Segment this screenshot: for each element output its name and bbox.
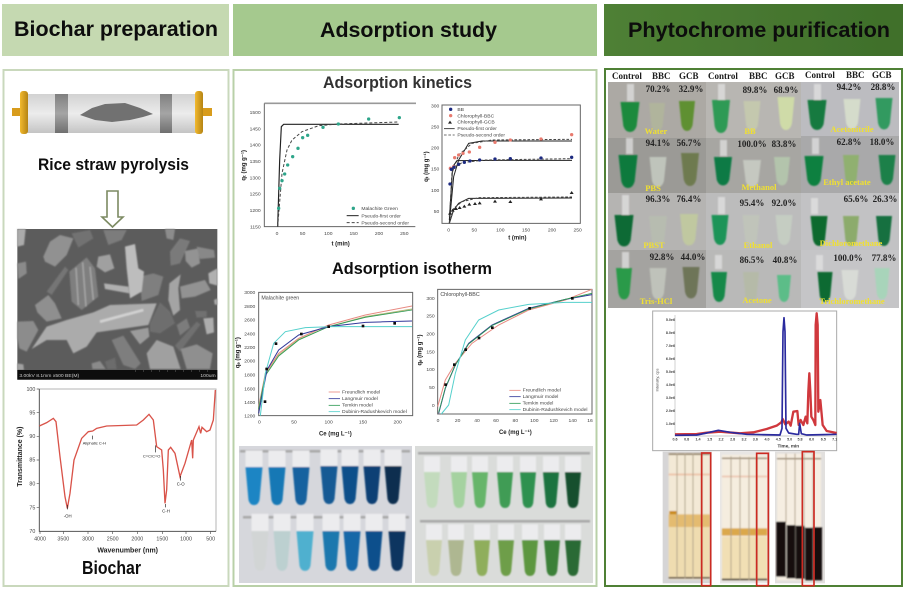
chart: LC-MS chromatogram: 0.6 [672, 437, 678, 441]
chart: FTIR spectrum: 100 [26, 387, 35, 393]
chart: malachite green isotherm: 0 [258, 419, 261, 425]
chart: chlorophyll-BBC isotherm: 16 [587, 418, 593, 424]
chart: malachite green kinetics [240, 103, 416, 248]
chart: chlorophyll kinetics: 250 [431, 125, 440, 131]
chart: LC-MS chromatogram: 6.0 [809, 437, 814, 441]
chart: malachite green isotherm: 2400 [244, 331, 256, 337]
chart: chlorophyll kinetics: Chlorophyll-BBC [457, 113, 495, 119]
header: phytochrome purification [604, 4, 903, 56]
photo grid: solvent extraction tubes: Tris-HCl [640, 296, 673, 306]
chart: malachite green kinetics: 0 [276, 231, 279, 237]
chart: FTIR spectrum: 3000 [82, 536, 94, 542]
solvent tube grid header: BBC [652, 71, 671, 81]
photo grid: solvent extraction tubes: 68.9% [774, 85, 798, 95]
heading: adsorption kinetics: Adsorption kinetics [323, 73, 472, 92]
photo grid: solvent extraction tubes: Water [645, 126, 668, 136]
solvent tube grid header: Control [708, 71, 738, 81]
photo grid: solvent extraction tubes: Ethanol [744, 240, 773, 250]
chart: malachite green kinetics: Pseudo-first order [361, 213, 401, 219]
photo grid: solvent extraction tubes: 89.8% [743, 85, 767, 95]
chart: LC-MS chromatogram [653, 311, 837, 451]
chart: malachite green kinetics: 1250 [250, 192, 261, 198]
chart: malachite green isotherm: 2800 [244, 304, 256, 310]
photo grid: solvent extraction tubes: PBST [643, 240, 665, 250]
photos: gel strips [663, 452, 825, 586]
chart: chlorophyll-BBC isotherm: Ce (mg L⁻¹) [499, 429, 532, 436]
chart: chlorophyll kinetics [423, 103, 582, 241]
header: adsorption study: Adsorption study [320, 19, 497, 42]
chart: malachite green kinetics: 200 [375, 231, 383, 237]
photo grid: solvent extraction tubes: 65.6% [844, 194, 868, 204]
chart: FTIR spectrum: Aliphatic C-H [83, 441, 106, 446]
chart: malachite green isotherm: 1400 [244, 400, 256, 406]
chart: malachite green isotherm: 2600 [244, 318, 256, 324]
chart: chlorophyll kinetics: 0 [447, 228, 450, 234]
chart: LC-MS chromatogram: 8.0e6 [666, 331, 675, 335]
chart: chlorophyll-BBC isotherm: 0 [432, 403, 435, 409]
label: rice straw pyrolysis: Rice straw pyrolysis [38, 155, 189, 174]
chart: malachite green isotherm: 150 [359, 419, 367, 425]
chart: LC-MS chromatogram: 5.0e6 [666, 318, 675, 322]
chart: FTIR spectrum: 70 [29, 529, 35, 535]
chart: FTIR spectrum: -OH [64, 514, 72, 519]
chart: chlorophyll kinetics: 50 [472, 228, 477, 234]
arrow: pyrolysis to biochar [102, 191, 123, 227]
chart: chlorophyll-BBC isotherm: 0 [437, 418, 440, 424]
chart: FTIR spectrum: C=C/C=O [143, 454, 160, 459]
chart: LC-MS chromatogram: 1.0e6 [666, 422, 675, 426]
chart: chlorophyll-BBC isotherm: 150 [426, 349, 435, 355]
chart: malachite green isotherm: Freundlich model [342, 389, 380, 395]
photo grid: solvent extraction tubes: Trichloromethane [819, 296, 885, 306]
chart: LC-MS chromatogram: 3.6 [753, 437, 758, 441]
solvent tube grid header [612, 70, 892, 81]
chart: malachite green kinetics: 50 [300, 231, 306, 237]
chart: chlorophyll-BBC isotherm: qₑ (mg g⁻¹) [416, 334, 423, 366]
chart: malachite green isotherm: 200 [394, 419, 402, 425]
photo grid: solvent extraction tubes: 92.0% [772, 198, 796, 208]
chart: LC-MS chromatogram: 4.0 [764, 437, 770, 441]
chart: malachite green isotherm [234, 290, 413, 437]
photo grid: solvent extraction tubes: 94.2% [837, 82, 861, 92]
chart: chlorophyll kinetics: Pseudo-second order [457, 132, 505, 138]
chart: chlorophyll-BBC isotherm: Temkin model [523, 401, 553, 407]
photo: malachite green tubes [239, 446, 412, 583]
chart: malachite green isotherm: Ce (mg L⁻¹) [319, 430, 352, 437]
chart: malachite green isotherm: Malachite green [261, 295, 299, 301]
chart: malachite green kinetics: Malachite Green [361, 206, 398, 212]
chart: chlorophyll-BBC isotherm: Chlorophyll-BBC [440, 292, 480, 298]
chart: chlorophyll-BBC isotherm: 60 [493, 418, 499, 424]
chart: FTIR spectrum: Transmittance (%) [17, 427, 24, 487]
chart: chlorophyll-BBC isotherm: 20 [455, 418, 461, 424]
photo grid: solvent extraction tubes: 56.7% [677, 138, 701, 148]
chart: LC-MS chromatogram: 6.0e6 [666, 357, 675, 361]
chart: FTIR spectrum: 75 [29, 505, 35, 511]
chart: chlorophyll-BBC isotherm: 140 [568, 418, 577, 424]
icon: pyrolysis tube furnace [12, 91, 212, 134]
chart: LC-MS chromatogram: 2.0e6 [666, 409, 675, 413]
chart: FTIR spectrum: Wavenumber (nm) [97, 548, 158, 555]
chart: LC-MS chromatogram: Intensity, cps [654, 369, 659, 391]
chart: chlorophyll-BBC isotherm: 100 [530, 418, 539, 424]
panel: adsorption study [234, 70, 596, 586]
chart: chlorophyll kinetics: 200 [548, 228, 556, 234]
chart: LC-MS chromatogram: 2.8 [730, 437, 735, 441]
chart: LC-MS chromatogram: 7.1 [832, 437, 837, 441]
chart: chlorophyll kinetics: qₜ (mg g⁻¹) [423, 151, 430, 182]
chart: FTIR spectrum: 1500 [156, 536, 168, 542]
chart: chlorophyll-BBC isotherm: 40 [474, 418, 480, 424]
chart: chlorophyll kinetics: 300 [431, 103, 440, 109]
image: SEM micrograph: 100um [200, 373, 216, 379]
photo grid: solvent extraction tubes: 96.3% [646, 194, 670, 204]
chart: chlorophyll-BBC isotherm [416, 289, 593, 436]
chart: chlorophyll kinetics: 200 [431, 146, 440, 152]
image: SEM micrograph: 3.00kV 8.1mm x500 BE(M) [19, 373, 80, 379]
photo grid: solvent extraction tubes: Ethyl acetate [823, 177, 871, 187]
chart: LC-MS chromatogram: 1.5 [707, 437, 712, 441]
chart: chlorophyll-BBC isotherm: 120 [549, 418, 558, 424]
solvent tube grid header: Control [805, 70, 835, 80]
chart: LC-MS chromatogram: 1.4 [695, 437, 702, 441]
photo grid: solvent extraction tubes: PBS [645, 183, 661, 193]
header: phytochrome purification: Phytochrome purification [628, 19, 890, 42]
photo grid: solvent extraction tubes: 100.0% [737, 139, 767, 149]
chart: LC-MS chromatogram: 3.0e6 [666, 396, 675, 400]
chart: malachite green kinetics: 1200 [250, 208, 261, 214]
photo grid: solvent extraction tubes: 94.1% [646, 138, 670, 148]
chart: FTIR spectrum: C-O [177, 482, 185, 487]
chart: chlorophyll kinetics: 50 [434, 209, 440, 215]
photo grid: solvent extraction tubes: 18.0% [870, 137, 894, 147]
label: biochar: Biochar [82, 558, 141, 578]
chart: malachite green isotherm: 3000 [244, 290, 256, 296]
chart: malachite green isotherm: 2000 [244, 359, 256, 365]
chart: chlorophyll-BBC isotherm: 300 [426, 296, 435, 302]
photo grid: solvent extraction tubes: 32.9% [679, 84, 703, 94]
chart: malachite green kinetics: Pseudo-second order [361, 220, 409, 226]
solvent tube grid header: GCB [679, 71, 699, 81]
chart: FTIR spectrum [17, 387, 216, 555]
chart: chlorophyll kinetics: t (min) [508, 235, 526, 241]
chart: FTIR spectrum: 4000 [34, 536, 46, 542]
chart: malachite green isotherm: 1800 [244, 372, 256, 378]
chart: FTIR spectrum: 2000 [131, 536, 143, 542]
panel: biochar preparation [4, 70, 228, 586]
chart: malachite green kinetics: 1500 [250, 110, 261, 116]
chart: chlorophyll-BBC isotherm: 100 [426, 367, 435, 373]
chart: LC-MS chromatogram: 3.2 [741, 437, 747, 441]
photo grid: solvent extraction tubes: 28.8% [871, 82, 895, 92]
photo grid: solvent extraction tubes [608, 82, 899, 308]
photo grid: solvent extraction tubes: Acetonitrile [831, 124, 874, 134]
chart: FTIR spectrum: 1000 [180, 536, 192, 542]
chart: malachite green isotherm: 2200 [244, 345, 256, 351]
chart: FTIR spectrum: 3500 [57, 536, 69, 542]
photo grid: solvent extraction tubes: 95.4% [740, 198, 764, 208]
chart: malachite green isotherm: 50 [291, 419, 297, 425]
photo grid: solvent extraction tubes: 83.8% [772, 139, 796, 149]
header: adsorption study [233, 4, 597, 56]
photo grid: solvent extraction tubes: Methanol [742, 182, 777, 192]
chart: malachite green kinetics: 150 [350, 231, 358, 237]
chart: LC-MS chromatogram: Time, min [778, 444, 799, 449]
chart: LC-MS chromatogram: 7.0e6 [666, 344, 675, 348]
photo grid: solvent extraction tubes: 76.4% [677, 194, 701, 204]
chart: FTIR spectrum: C-H [162, 509, 170, 514]
chart: FTIR spectrum: 90 [29, 434, 35, 440]
chart: chlorophyll kinetics: 150 [522, 228, 530, 234]
photo grid: solvent extraction tubes: BB [744, 126, 756, 136]
photo grid: solvent extraction tubes: 70.2% [646, 84, 670, 94]
chart: chlorophyll-BBC isotherm: Langmuir model [523, 394, 558, 400]
image: SEM micrograph [17, 229, 217, 380]
chart: chlorophyll-BBC isotherm: Dubinin-Radushkevich model [523, 407, 588, 413]
chart: chlorophyll kinetics: 100 [496, 228, 505, 234]
photo grid: solvent extraction tubes: Acetone [742, 295, 772, 305]
chart: LC-MS chromatogram: 5.0 [787, 437, 792, 441]
chart: malachite green isotherm: 1200 [244, 414, 256, 420]
heading: adsorption isotherm: Adsorption isotherm [332, 259, 492, 278]
chart: malachite green kinetics: 1150 [250, 224, 261, 230]
photo grid: solvent extraction tubes: 62.8% [837, 137, 861, 147]
chart: malachite green isotherm: Langmuir model [342, 396, 378, 402]
chart: chlorophyll kinetics: Pseudo-first order [457, 126, 497, 132]
header: biochar preparation: Biochar preparation [14, 18, 218, 41]
chart: LC-MS chromatogram: 2.2 [718, 437, 724, 441]
solvent tube grid header: BBC [749, 71, 768, 81]
solvent tube grid header: GCB [872, 70, 892, 80]
chart: malachite green isotherm: 100 [325, 419, 333, 425]
chart: chlorophyll-BBC isotherm: Freundlich model [523, 388, 561, 394]
panel: phytochrome purification [605, 69, 902, 586]
photo grid: solvent extraction tubes: 86.5% [740, 255, 764, 265]
photo grid: solvent extraction tubes: Dichloromethane [820, 238, 883, 248]
header: biochar preparation [2, 4, 229, 56]
photo grid: solvent extraction tubes: 77.8% [872, 253, 896, 263]
chart: FTIR spectrum: 80 [29, 481, 35, 487]
chart: chlorophyll kinetics: Chlorophyll-GCB [457, 120, 495, 126]
chart: FTIR spectrum: 95 [29, 410, 35, 416]
solvent tube grid header: GCB [775, 71, 795, 81]
chart: malachite green isotherm: Temkin model [342, 403, 373, 409]
photo: chlorophyll tubes [415, 446, 593, 583]
chart: LC-MS chromatogram: 5.0e6 [666, 370, 675, 374]
chart: chlorophyll kinetics: 250 [573, 228, 582, 234]
chart: malachite green isotherm: qₑ (mg g⁻¹) [234, 337, 241, 368]
chart: FTIR spectrum: 85 [29, 458, 35, 464]
chart: malachite green isotherm: Dubinin-Radushkevich model [342, 409, 407, 415]
photo grid: solvent extraction tubes: 92.8% [650, 252, 674, 262]
chart: malachite green kinetics: 100 [324, 231, 333, 237]
chart: LC-MS chromatogram: 4.5 [776, 437, 781, 441]
solvent tube grid header: BBC [846, 70, 865, 80]
chart: malachite green isotherm: 1600 [244, 386, 256, 392]
chart: malachite green kinetics: 250 [400, 231, 409, 237]
photo grid: solvent extraction tubes: 26.3% [873, 194, 897, 204]
chart: chlorophyll kinetics: 100 [431, 188, 440, 194]
chart: chlorophyll-BBC isotherm: 250 [426, 313, 435, 319]
chart: chlorophyll kinetics: 150 [431, 167, 440, 173]
chart: LC-MS chromatogram: 4.0e6 [666, 383, 675, 387]
chart: LC-MS chromatogram: 0.8 [684, 437, 689, 441]
chart: malachite green kinetics: 1400 [250, 143, 261, 149]
chart: malachite green kinetics: 1450 [250, 126, 261, 132]
chart: FTIR spectrum: 2500 [107, 536, 119, 542]
chart: malachite green kinetics: 1300 [250, 175, 261, 181]
chart: chlorophyll-BBC isotherm: 80 [513, 418, 518, 424]
chart: chlorophyll kinetics: BB [457, 107, 465, 113]
chart: chlorophyll-BBC isotherm: 200 [426, 331, 435, 337]
chart: FTIR spectrum: 500 [206, 536, 215, 542]
photo grid: solvent extraction tubes: 40.8% [773, 255, 797, 265]
chart: LC-MS chromatogram: 6.5 [821, 437, 826, 441]
photo grid: solvent extraction tubes: 44.0% [681, 252, 705, 262]
solvent tube grid header: Control [612, 71, 642, 81]
chart: malachite green kinetics: t (min) [332, 242, 350, 248]
chart: chlorophyll-BBC isotherm: 50 [429, 385, 435, 391]
chart: LC-MS chromatogram: 5.8 [797, 437, 803, 441]
photo grid: solvent extraction tubes: 100.0% [833, 253, 863, 263]
chart: malachite green kinetics: 1350 [250, 159, 261, 165]
chart: malachite green kinetics: qₜ (mg g⁻¹) [240, 150, 247, 181]
